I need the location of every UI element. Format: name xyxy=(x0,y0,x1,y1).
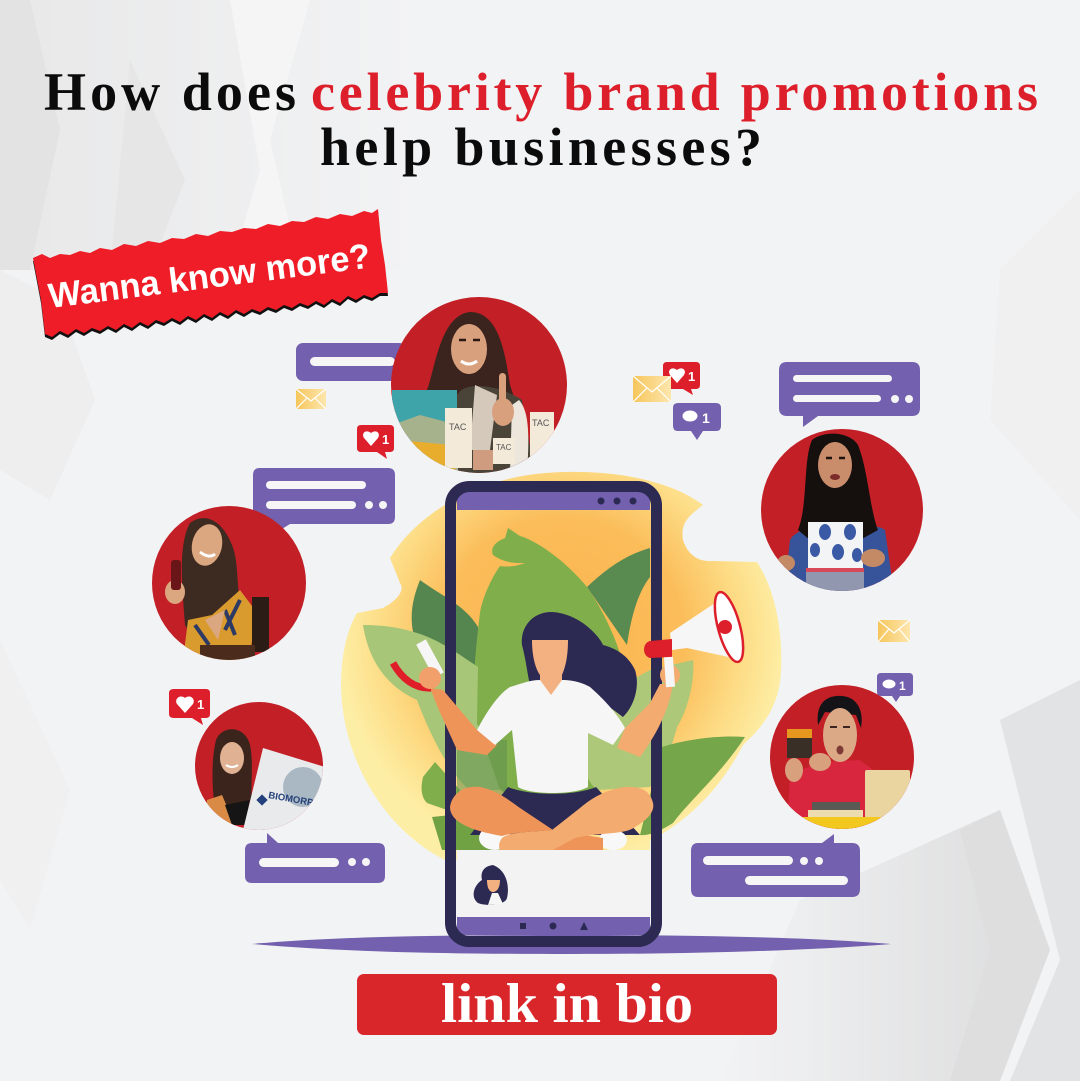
woman figure with magnet and megaphone xyxy=(393,589,749,850)
celebrity photo circle: left xyxy=(152,506,306,665)
like badge top centre: 1 xyxy=(382,432,389,447)
torn banner: Wanna know more?: Wanna know more? xyxy=(46,237,372,316)
torn banner: Wanna know more? xyxy=(33,209,388,340)
celebrity photo circle: top xyxy=(391,297,567,475)
left shin xyxy=(553,830,603,850)
like badge top centre xyxy=(357,425,394,459)
left leg xyxy=(450,787,553,836)
shorts xyxy=(470,787,640,835)
hair xyxy=(522,612,637,717)
shirt xyxy=(477,680,625,793)
leaves xyxy=(363,528,745,850)
like badge left xyxy=(169,689,210,725)
like badge left: 1 xyxy=(197,697,204,712)
speech bubble 2 xyxy=(253,468,395,532)
celebrity photo circle: top: TAC xyxy=(532,418,550,428)
right arm xyxy=(617,684,673,757)
megaphone xyxy=(670,603,733,658)
neck and face xyxy=(532,640,568,695)
left arm xyxy=(430,688,497,755)
title: help businesses? xyxy=(320,117,762,177)
screen backdrop xyxy=(457,492,650,935)
speech bubble 3 xyxy=(779,362,920,427)
ground shadow xyxy=(252,935,891,954)
yellow sun blob xyxy=(341,472,781,860)
comment badge centre: 1 xyxy=(702,410,710,426)
like badge top right: 1 xyxy=(688,369,695,384)
celebrity photo circle: bottom right xyxy=(770,685,914,832)
title: celebrity brand promotions xyxy=(311,62,1038,122)
celebrity photo circle: bottom left: BIOMORPH xyxy=(267,790,321,810)
title xyxy=(44,62,1038,177)
phone xyxy=(450,486,656,942)
comment badge right: 1 xyxy=(899,679,906,693)
speech bubble 1 xyxy=(296,343,406,381)
right leg xyxy=(499,787,653,850)
speech bubble 5 xyxy=(691,834,860,897)
link in bio button: link in bio xyxy=(441,973,693,1035)
celebrity photo circle: top: TAC xyxy=(496,443,512,452)
comment badge centre xyxy=(673,403,721,440)
comment badge right xyxy=(877,673,913,702)
magnet xyxy=(393,663,431,688)
speech bubble 4 xyxy=(245,833,385,883)
celebrity photo circle: top: TAC xyxy=(449,422,467,432)
link in bio button xyxy=(357,973,777,1035)
profile avatar on phone xyxy=(474,865,508,905)
celebrity photo circle: right top xyxy=(761,429,923,600)
celebrity photo circle: bottom left xyxy=(195,702,325,835)
title: How does xyxy=(44,62,296,122)
feet xyxy=(479,826,511,850)
like badge top right xyxy=(663,362,700,395)
envelope icons xyxy=(296,376,910,642)
